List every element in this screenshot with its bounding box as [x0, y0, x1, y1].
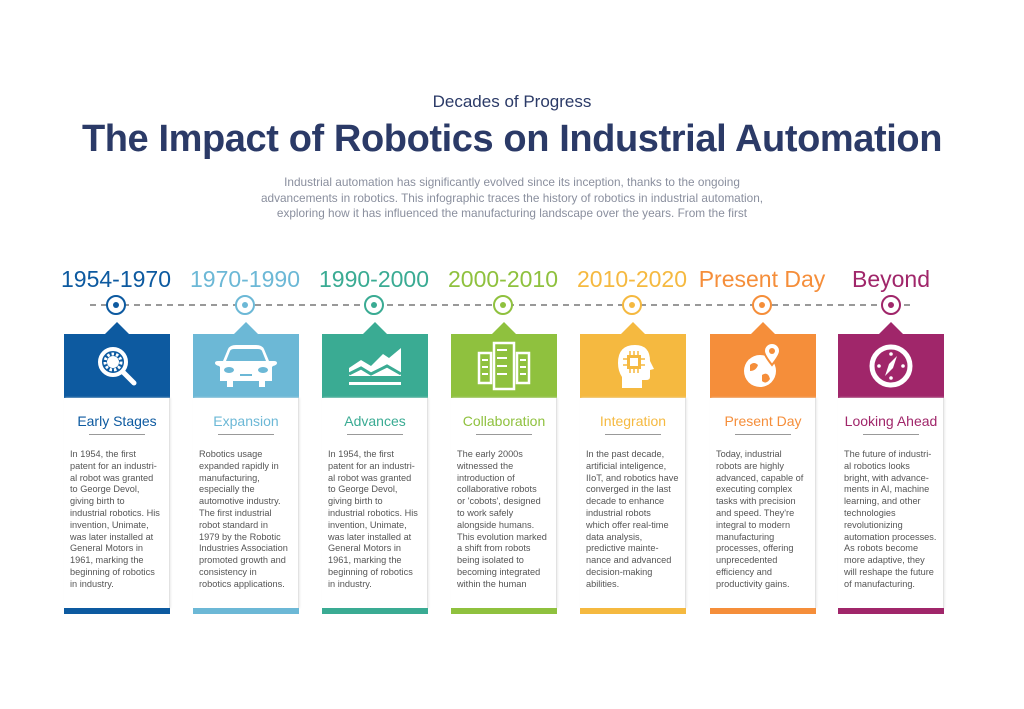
panel: Integration: Integration	[600, 413, 666, 429]
panel: Expansion: robot standard in	[199, 520, 268, 530]
year: 2010-2020: 2010-2020	[577, 266, 687, 292]
panel: Collaboration: This evolution marked	[457, 532, 547, 542]
panel: Looking Ahead: The future of industri-	[844, 449, 931, 459]
panel: Looking Ahead: more adaptive, they	[844, 555, 925, 565]
panel: Expansion: Industries Association	[199, 543, 288, 553]
panel: Expansion: manufacturing,	[199, 473, 260, 483]
panel: Early Stages	[64, 322, 171, 614]
panel: Advances: beginning of robotics	[328, 567, 413, 577]
year: 1970-1990: 1970-1990	[190, 266, 300, 292]
panel: Advances	[322, 322, 429, 614]
year: 1990-2000: 1990-2000	[319, 266, 429, 292]
panel: Looking Ahead: al robotics looks	[844, 461, 910, 471]
icon: car	[215, 345, 277, 387]
panel: Advances: In 1954, the first	[328, 449, 394, 459]
panel: Advances: Advances	[344, 413, 406, 429]
panel: Integration	[580, 322, 687, 614]
panel: Early Stages: Early Stages	[77, 413, 157, 429]
panel: Present Day: and speed. They're	[716, 508, 794, 518]
panel: Expansion: promoted growth and	[199, 555, 286, 565]
year: Present Day: Present Day	[699, 266, 825, 292]
panel: Looking Ahead: As robots become	[844, 543, 918, 553]
panel: Present Day: tasks with precision	[716, 496, 796, 506]
panel: Expansion: 1979 by the Robotic	[199, 532, 281, 542]
panel: Present Day: robots are highly	[716, 461, 784, 471]
intro text	[261, 175, 763, 220]
icon: globe with pin	[744, 344, 779, 387]
panel: Early Stages: 1961, marking the	[70, 555, 144, 565]
panel: Collaboration: alongside humans.	[457, 520, 534, 530]
panel: Advances: giving birth to	[328, 496, 383, 506]
dot 5	[622, 295, 642, 315]
panel: Present Day: Today, industrial	[716, 449, 782, 459]
panel: Present Day: advanced, capable of	[716, 473, 803, 483]
panel: Early Stages: beginning of robotics	[70, 567, 155, 577]
panel: Advances: was later installed at	[328, 532, 411, 542]
panel: Looking Ahead: will reshape the future	[844, 567, 934, 577]
panel: Present Day: efficiency and	[716, 567, 772, 577]
dot 6	[752, 295, 772, 315]
panel: Collaboration	[451, 322, 558, 614]
panel: Early Stages: patent for an industri-	[70, 461, 157, 471]
panel: Early Stages: to George Devol,	[70, 484, 139, 494]
panel: Expansion: robotics applications.	[199, 579, 285, 589]
panel: Integration: artificial inteligence,	[586, 461, 666, 471]
panel: Looking Ahead: ments in AI, machine	[844, 484, 929, 494]
icon: head with chip	[618, 345, 654, 388]
panel: Early Stages: al robot was granted	[70, 473, 153, 483]
panel: Expansion: automotive industry.	[199, 496, 281, 506]
panel: Collaboration: witnessed the	[457, 461, 513, 471]
panel: Advances: 1961, marking the	[328, 555, 402, 565]
panel: Collaboration: to work safely	[457, 508, 513, 518]
year: 1954-1970: 1954-1970	[61, 266, 171, 292]
panel: Looking Ahead: automation processes.	[844, 532, 936, 542]
panel: Integration: which offer real-time	[586, 520, 669, 530]
panel: Early Stages: industrial robotics. His	[70, 508, 160, 518]
panel: Expansion	[193, 322, 300, 614]
panel: Looking Ahead	[838, 322, 945, 614]
timeline dashed line	[90, 304, 910, 306]
intro text: exploring how it has influenced the manufacturing landscape over the years. From the first	[277, 206, 747, 220]
panel: Early Stages: giving birth to	[70, 496, 125, 506]
dot 3	[364, 295, 384, 315]
panel: Integration: converged in the last	[586, 484, 671, 494]
intro text: advancements in robotics. This infographic traces the history of robotics in industrial automation,	[261, 190, 763, 204]
panel: Integration: decision-making	[586, 567, 652, 577]
dot 7	[881, 295, 901, 315]
panel: Collaboration: being isolated to	[457, 555, 524, 565]
panel: Collaboration: Collaboration	[463, 413, 545, 429]
panel: Advances: industrial robotics. His	[328, 508, 418, 518]
panel: Looking Ahead: Looking Ahead	[845, 413, 937, 429]
panel: Expansion: The first industrial	[199, 508, 272, 518]
panel: Present Day: executing complex	[716, 484, 792, 494]
panel: Early Stages: was later installed at	[70, 532, 153, 542]
panel: Advances: invention, Unimate,	[328, 520, 407, 530]
panel: Integration: predictive mainte-	[586, 543, 659, 553]
icon: area chart	[349, 348, 401, 385]
panel: Present Day: Present Day	[724, 413, 802, 429]
subtitle: Decades of Progress	[433, 92, 591, 111]
panel: Looking Ahead: revolutionizing	[844, 520, 903, 530]
panel: Present Day: manufacturing	[716, 532, 774, 542]
panel: Present Day: integral to modern	[716, 520, 790, 530]
panel: Expansion: Expansion	[213, 413, 279, 429]
dot 2	[235, 295, 255, 315]
panel: Advances: in industry.	[328, 579, 372, 589]
panel: Expansion: Robotics usage	[199, 449, 262, 459]
panel: Integration: nance and advanced	[586, 555, 671, 565]
panel: Collaboration: introduction of	[457, 473, 515, 483]
panel: Integration: IIoT, and robotics have	[586, 473, 678, 483]
panel: Looking Ahead: of manufacturing.	[844, 579, 915, 589]
panel: Collaboration: collaborative robots	[457, 484, 537, 494]
panel: Integration: data analysis,	[586, 532, 642, 542]
panel: Advances: patent for an industri-	[328, 461, 415, 471]
panel: Expansion: expanded rapidly in	[199, 461, 279, 471]
panel: Integration: decade to enhance	[586, 496, 664, 506]
panel: Collaboration: within the human	[457, 579, 526, 589]
panel: Looking Ahead: technologies	[844, 508, 896, 518]
panel: Advances: General Motors in	[328, 543, 401, 553]
panel: Present Day	[710, 322, 817, 614]
year: Beyond: Beyond	[852, 266, 930, 292]
panel: Collaboration: a shift from robots	[457, 543, 531, 553]
icon: magnifier gear	[98, 347, 136, 386]
panel: Collaboration: becoming integrated	[457, 567, 540, 577]
panel: Present Day: unprecedented	[716, 555, 777, 565]
panel: Present Day: processes, offering	[716, 543, 793, 553]
panel: Early Stages: in industry.	[70, 579, 114, 589]
intro text: Industrial automation has significantly evolved since its inception, thanks to the ongoing	[284, 175, 740, 189]
panel: Collaboration: The early 2000s	[457, 449, 523, 459]
panel: Looking Ahead: bright, with advance-	[844, 473, 929, 483]
panel: Integration: industrial robots	[586, 508, 651, 518]
icon: compass	[870, 344, 912, 388]
icon: servers	[478, 342, 530, 390]
dot 1	[106, 295, 126, 315]
dot 4	[493, 295, 513, 315]
title: The Impact of Robotics on Industrial Automation	[82, 118, 942, 160]
panel: Early Stages: In 1954, the first	[70, 449, 136, 459]
panel: Advances: to George Devol,	[328, 484, 397, 494]
panel: Present Day: productivity gains.	[716, 579, 790, 589]
panel: Collaboration: or 'cobots', designed	[457, 496, 541, 506]
panel: Integration: In the past decade,	[586, 449, 664, 459]
panel: Integration: abilities.	[586, 579, 619, 589]
panel: Looking Ahead: learning, and other	[844, 496, 921, 506]
panel: Expansion: consistency in	[199, 567, 257, 577]
panel: Early Stages: General Motors in	[70, 543, 143, 553]
year: 2000-2010: 2000-2010	[448, 266, 558, 292]
panel: Early Stages: invention, Unimate,	[70, 520, 149, 530]
panel: Advances: al robot was granted	[328, 473, 411, 483]
panel: Expansion: especially the	[199, 484, 255, 494]
